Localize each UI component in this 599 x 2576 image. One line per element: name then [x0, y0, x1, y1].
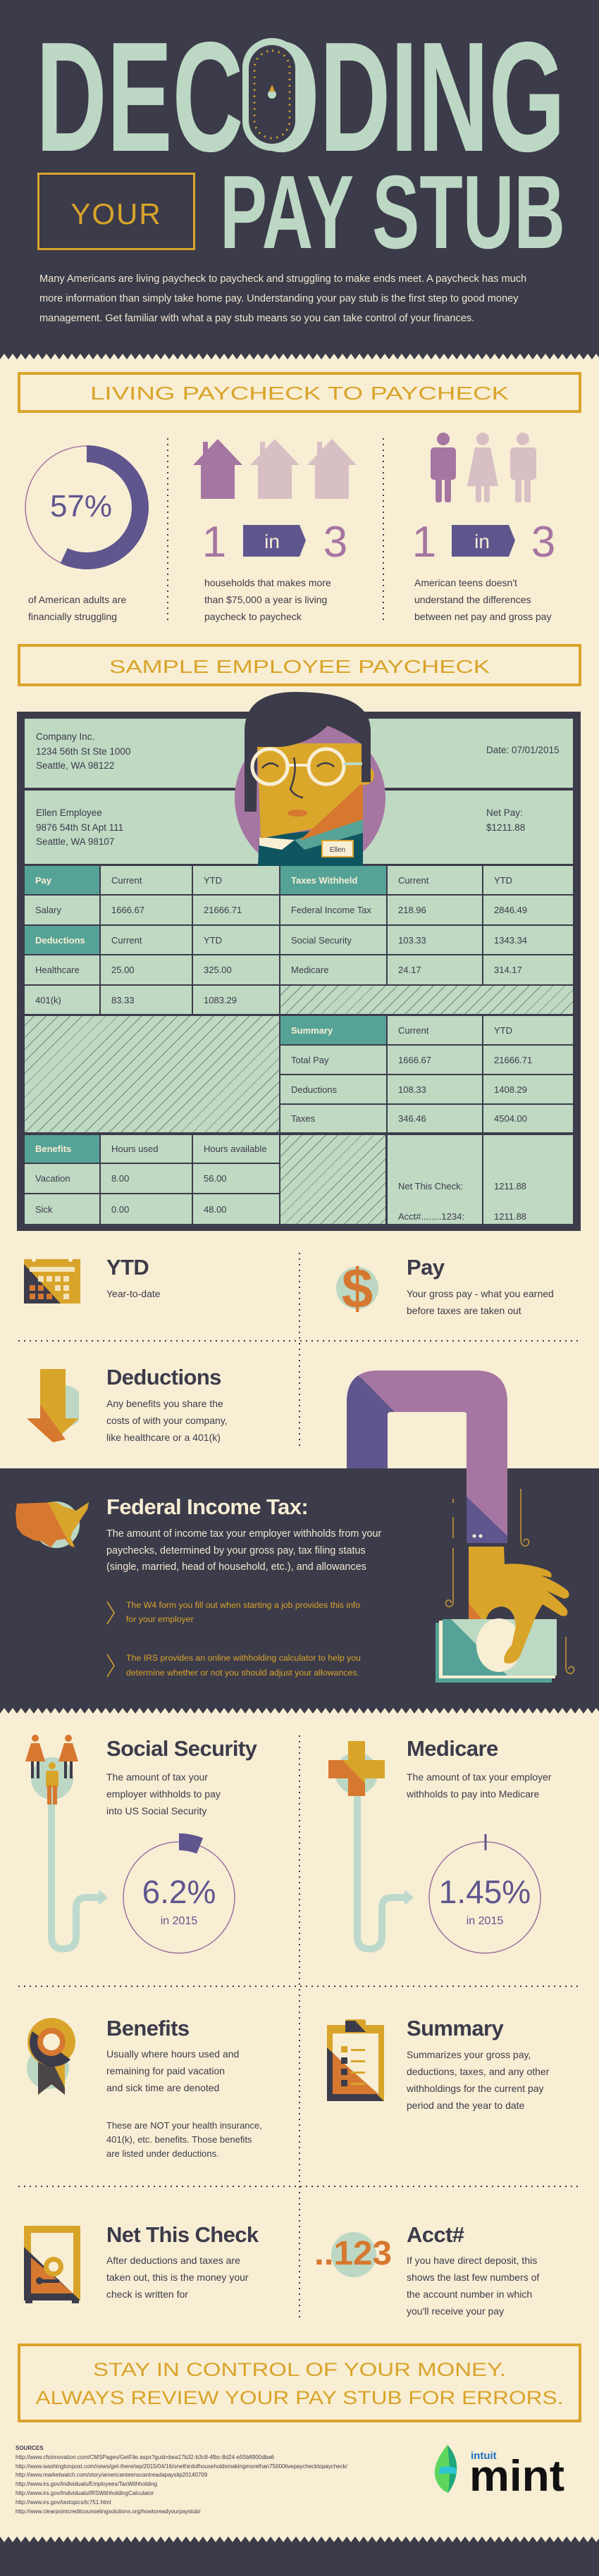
- bullet: IRS: [106, 1653, 361, 1677]
- text: Deductions: [106, 1398, 228, 1443]
- panel: pay stub: 346.46: [398, 1113, 426, 1124]
- panel: pay stub: Acct#........1234:: [398, 1211, 464, 1222]
- text: Federal Income Tax: (single, married, head of household, etc.), and allowances: [106, 1561, 366, 1573]
- text: Medicare: [407, 1771, 551, 1800]
- panel: pay stub: Medicare: [291, 965, 328, 975]
- intro text: Many Americans are living paycheck to paycheck and struggling to make ends meet. A paycheck has much: [39, 273, 526, 285]
- heading: Benefits: Benefits: [106, 2016, 190, 2041]
- dotted dividers: [18, 1253, 578, 2317]
- stub: date: Date: 07/01/2015: [486, 745, 560, 755]
- intro text: management. Get familiar with what a pay stub means so you can take control of your finances.: [39, 313, 474, 324]
- panel: pay stub: Deductions: [35, 934, 85, 946]
- stub: employee info: 9876 54th St Apt 111: [36, 822, 123, 833]
- icon: medical cross: [328, 1741, 385, 1796]
- federal dark band: [0, 1468, 599, 1714]
- text: Social Security: [106, 1771, 221, 1816]
- stat: 1 in 3 teens: 1: [412, 518, 436, 566]
- chart: social security 6.2%: in 2015: [161, 1915, 197, 1927]
- heading box: sample employee paycheck: [18, 644, 581, 686]
- panel: pay stub: 325.00: [204, 965, 232, 975]
- heading box: sample employee paycheck: SAMPLE EMPLOYEE PAYCHECK: [109, 656, 490, 677]
- name badge: Ellen: [330, 846, 345, 854]
- panel: pay stub: Net This Check:: [398, 1181, 463, 1191]
- chart: social security 6.2%: [51, 1790, 235, 1953]
- panel: pay stub: Current: [111, 934, 142, 946]
- bullet: W4: The W4 form you fill out when starting a job provides this info: [126, 1600, 360, 1610]
- intro text: [39, 273, 526, 324]
- stat text: households: [204, 577, 331, 622]
- panel: pay stub: Current: [398, 1024, 428, 1036]
- icon: ribbon badge: [27, 2018, 75, 2095]
- stat text: adults: of American adults are: [28, 594, 126, 605]
- bullet: W4: for your employer: [126, 1614, 194, 1624]
- panel: pay stub: YTD: [494, 1024, 512, 1036]
- stat: 1 in 3 teens: in: [474, 531, 490, 552]
- stub: employee info: Seattle, WA 98107: [36, 836, 114, 847]
- text: Medicare: withholds to pay into Medicare: [407, 1788, 539, 1800]
- icon: people: [431, 433, 536, 502]
- panel: pay stub: Total Pay: [291, 1054, 328, 1065]
- panel: pay stub: [17, 712, 581, 1231]
- callout: stay in control: ALWAYS REVIEW YOUR PAY STUB FOR ERRORS.: [35, 2387, 564, 2408]
- chart: medicare 1.45%: 1.45%: [439, 1874, 531, 1910]
- text: Acct#: you'll receive your pay: [407, 2305, 504, 2317]
- panel: pay stub: 2846.49: [494, 905, 527, 915]
- panel: pay stub: YTD: [494, 875, 512, 885]
- bullet: IRS: determine whether or not you should adjust your allowances.: [126, 1667, 359, 1677]
- panel: pay stub: 4504.00: [494, 1113, 527, 1124]
- stub: summary table: [280, 1016, 573, 1132]
- name badge: [322, 841, 353, 857]
- chart: medicare 1.45%: [357, 1795, 541, 1953]
- sources: http://www.washingtonpost.com/news/get-there/wp/2015/04/16/onethirdofhouseholdsmakingmorethan75000livepaychecktopaycheck/: [16, 2463, 347, 2470]
- stub: taxes withheld table: [280, 866, 573, 1014]
- heading: Federal Income Tax: Federal Income Tax:: [106, 1494, 308, 1519]
- text: Deductions: costs of with your company,: [106, 1415, 228, 1426]
- text: Summary: [407, 2049, 550, 2111]
- heading: Medicare: Medicare: [407, 1736, 498, 1761]
- heading: Deductions: Deductions: [106, 1365, 221, 1389]
- panel: pay stub: 401(k): [35, 995, 61, 1005]
- text: benefits note: are listed under deductions.: [106, 2148, 219, 2159]
- stat text: teens: understand the differences: [414, 594, 531, 605]
- panel: pay stub: 0.00: [111, 1203, 129, 1215]
- icon: calendar: [24, 1259, 80, 1304]
- callout: stay in control: STAY IN CONTROL OF YOUR MONEY.: [93, 2359, 506, 2380]
- stat: 1 in 3 teens: 3: [531, 518, 555, 566]
- panel: pay stub: 1666.67: [398, 1054, 431, 1065]
- intro text: more information than simply take home pay. Understanding your pay stub is the first step to good money: [39, 293, 519, 304]
- text: Pay: [407, 1288, 554, 1316]
- stub: company info: 1234 56th St Ste 1000: [36, 745, 130, 757]
- text: Social Security: employer withholds to pay: [106, 1788, 221, 1800]
- panel: pay stub: Benefits: [35, 1144, 71, 1154]
- panel: pay stub: 25.00: [111, 965, 135, 975]
- chart: social security 6.2%: 6.2%: [142, 1874, 216, 1910]
- panel: pay stub: Vacation: [35, 1173, 70, 1184]
- illustration: arm, hand and money: [347, 1370, 575, 1683]
- panel: pay stub: 83.33: [111, 995, 135, 1005]
- header dark band: [0, 0, 599, 359]
- stat: 1 in 3 households: [202, 518, 347, 566]
- text: Net This Check: After deductions and taxes are: [106, 2255, 240, 2266]
- stub: employee info: [25, 791, 573, 864]
- logo: intuit mint: [430, 2444, 567, 2494]
- stub: net pay: $1211.88: [486, 822, 525, 833]
- text: Benefits: Usually where hours used and: [106, 2048, 239, 2060]
- text: Acct#: the account number in which: [407, 2289, 532, 2300]
- icon: social security people: [25, 1735, 78, 1804]
- stat text: teens: between net pay and gross pay: [414, 611, 552, 622]
- text: Federal Income Tax: [106, 1528, 382, 1573]
- panel: pay stub: Healthcare: [35, 965, 80, 975]
- text: Pay: Your gross pay - what you earned: [407, 1288, 554, 1299]
- title word: YOUR box: YOUR: [70, 197, 162, 230]
- stat: 1 in 3 households: 1: [202, 518, 226, 566]
- stats graphics: [25, 433, 555, 620]
- sources: http://www.irs.gov/Individuals/Employees/TaxWithholding: [16, 2481, 157, 2487]
- panel: pay stub: 1408.29: [494, 1084, 527, 1095]
- header zigzag edge: [0, 354, 599, 359]
- panel: pay stub: 1083.29: [204, 995, 237, 1005]
- text: Federal Income Tax: The amount of income tax your employer withholds from your: [106, 1528, 381, 1540]
- stat text: teens: American teens doesn't: [414, 577, 517, 588]
- chart: medicare 1.45%: in 2015: [467, 1915, 503, 1927]
- panel: pay stub: Pay: [35, 875, 51, 885]
- icon: houses: [193, 439, 357, 499]
- sources: http://www.clearpointcreditcounselingsolutions.org/howtoreadyourpaystub/: [16, 2508, 200, 2515]
- text: Acct#: shows the last few numbers of: [407, 2272, 539, 2283]
- text: benefits note: These are NOT your health insurance,: [106, 2120, 262, 2131]
- stat text: households: paycheck to paycheck: [204, 611, 302, 622]
- panel: pay stub: 56.00: [204, 1173, 227, 1184]
- sources: [16, 2444, 347, 2516]
- heading: YTD: YTD: [106, 1255, 149, 1280]
- stub: pay table: [25, 866, 279, 1014]
- stub: company info: Company Inc.: [36, 731, 94, 742]
- text: benefits note: 401(k), etc. benefits. Those benefits: [106, 2134, 252, 2145]
- stub: net pay: Net Pay:: [486, 807, 523, 818]
- stub: employee info: Ellen Employee: [36, 807, 102, 818]
- panel: pay stub: Current: [398, 875, 428, 885]
- panel: pay stub: 21666.71: [204, 905, 242, 915]
- text: Summary: deductions, taxes, and any other: [407, 2066, 549, 2077]
- text: Medicare: The amount of tax your employer: [407, 1771, 551, 1783]
- panel: pay stub: 103.33: [398, 934, 426, 946]
- text: Benefits: and sick time are denoted: [106, 2082, 219, 2093]
- heading: Social Security: Social Security: [106, 1736, 257, 1761]
- heading: Summary: Summary: [407, 2016, 503, 2041]
- text: Summary: withholdings for the current pay: [407, 2083, 544, 2094]
- stat text: households: households that makes more: [204, 577, 331, 588]
- stub: benefits table: [25, 1135, 279, 1224]
- text: Benefits: remaining for paid vacation: [106, 2065, 225, 2076]
- panel: pay stub: Federal Income Tax: [291, 905, 371, 915]
- panel: pay stub: Deductions: [291, 1084, 337, 1095]
- icon: us map: [16, 1501, 89, 1548]
- panel: pay stub: Hours used: [111, 1144, 158, 1154]
- heading: Acct#: Acct#: [407, 2222, 464, 2247]
- icon: clipboard: [327, 2019, 384, 2101]
- heading: Net This Check: Net This Check: [106, 2222, 259, 2247]
- donut chart 57%: [25, 446, 148, 569]
- sources: http://www.irs.gov/Individuals/IRSWithholdingCalculator: [16, 2490, 154, 2496]
- panel: pay stub: Social Security: [291, 934, 352, 946]
- heading: Pay: Pay: [407, 1255, 444, 1280]
- title: decoding your pay stub: [36, 10, 565, 261]
- panel: pay stub: 8.00: [111, 1173, 129, 1184]
- icon: down arrow: [27, 1369, 79, 1442]
- sources: http://www.irs.gov/taxtopics/tc751.html: [16, 2499, 111, 2506]
- text: Net This Check: [106, 2255, 249, 2300]
- panel: pay stub: Hours available: [204, 1144, 267, 1154]
- text: Acct#: If you have direct deposit, this: [407, 2255, 537, 2266]
- title word: YOUR box: [38, 173, 194, 249]
- text: Acct#: [407, 2252, 539, 2320]
- stub: company info: [25, 719, 573, 788]
- logo: intuit mint: intuit: [471, 2450, 497, 2462]
- panel: pay stub: YTD: [204, 934, 222, 946]
- icon: account number: ..123: [314, 2235, 392, 2272]
- pipes and percentage circles: [48, 1796, 541, 1954]
- zigzag edge: [0, 1708, 599, 1714]
- bullet: W4: [106, 1600, 360, 1625]
- stub: company info: Seattle, WA 98122: [36, 760, 114, 771]
- bullet: IRS: The IRS provides an online withholding calculator to help you: [126, 1653, 361, 1663]
- stat text: households: than $75,000 a year is living: [204, 594, 327, 605]
- heading box: living paycheck to paycheck: LIVING PAYCHECK TO PAYCHECK: [90, 383, 510, 404]
- sources: SOURCES: [16, 2445, 44, 2451]
- heading box: living paycheck to paycheck: [18, 372, 581, 413]
- footer dark band: [0, 2537, 599, 2576]
- stat: 1 in 3 teens: [412, 518, 555, 566]
- panel: pay stub: 1343.34: [494, 934, 527, 946]
- panel: pay stub: Sick: [35, 1203, 53, 1215]
- text: Deductions: like healthcare or a 401(k): [106, 1432, 221, 1443]
- illustration: employee portrait: [235, 692, 385, 866]
- panel: pay stub: 1211.88: [494, 1211, 526, 1222]
- panel: pay stub: 108.33: [398, 1084, 426, 1095]
- text: Social Security: into US Social Security: [106, 1805, 206, 1816]
- text: Net This Check: taken out, this is the money your: [106, 2272, 249, 2283]
- callout: stay in control: [17, 2343, 582, 2423]
- stat: 1 in 3 households: in: [264, 531, 280, 552]
- panel: pay stub: 48.00: [204, 1203, 227, 1215]
- panel: pay stub: 1666.67: [111, 905, 144, 915]
- panel: pay stub: 1211.88: [494, 1181, 526, 1191]
- panel: pay stub: 21666.71: [494, 1054, 532, 1065]
- text: Summary: Summarizes your gross pay,: [407, 2049, 531, 2060]
- text: Federal Income Tax: paychecks, determined by your gross pay, tax filing status: [106, 1544, 366, 1556]
- stat: 1 in 3 households: 3: [323, 518, 347, 566]
- text: Social Security: The amount of tax your: [106, 1771, 208, 1783]
- panel: pay stub: Salary: [35, 905, 61, 915]
- text: Pay: before taxes are taken out: [407, 1305, 521, 1316]
- panel: pay stub: Current: [111, 875, 142, 885]
- sources: http://www.marketwatch.com/story/americanteenscantreadapayslip20140709: [16, 2472, 207, 2478]
- text: Deductions: Any benefits you share the: [106, 1398, 223, 1409]
- stat text: teens: [414, 577, 552, 622]
- panel: pay stub: 24.17: [398, 965, 421, 975]
- panel: pay stub: Taxes: [291, 1113, 315, 1124]
- panel: pay stub: 218.96: [398, 905, 426, 915]
- stub: net pay: [486, 807, 525, 833]
- donut chart 57%: 57%: [50, 489, 112, 524]
- panel: pay stub: 314.17: [494, 965, 522, 975]
- icon: safe: [24, 2226, 80, 2303]
- stub: net this check: [280, 1135, 573, 1224]
- text: benefits note: [106, 2120, 262, 2159]
- panel: pay stub: Taxes Withheld: [291, 875, 357, 885]
- stat text: adults: [28, 594, 126, 622]
- text: Benefits: [106, 2048, 239, 2093]
- stat text: adults: financially struggling: [28, 610, 117, 621]
- panel: pay stub: YTD: [204, 875, 222, 885]
- text: Summary: period and the year to date: [407, 2100, 524, 2111]
- panel: pay stub: Summary: [291, 1024, 333, 1036]
- text: YTD: Year-to-date: [106, 1288, 161, 1299]
- sources: http://www.cfsinnovation.com/CMSPages/GetFile.aspx?guid=bea17b32-b3c8-4fbc-8d24-e55b8900dba6: [16, 2454, 274, 2460]
- text: Net This Check: check is written for: [106, 2289, 188, 2300]
